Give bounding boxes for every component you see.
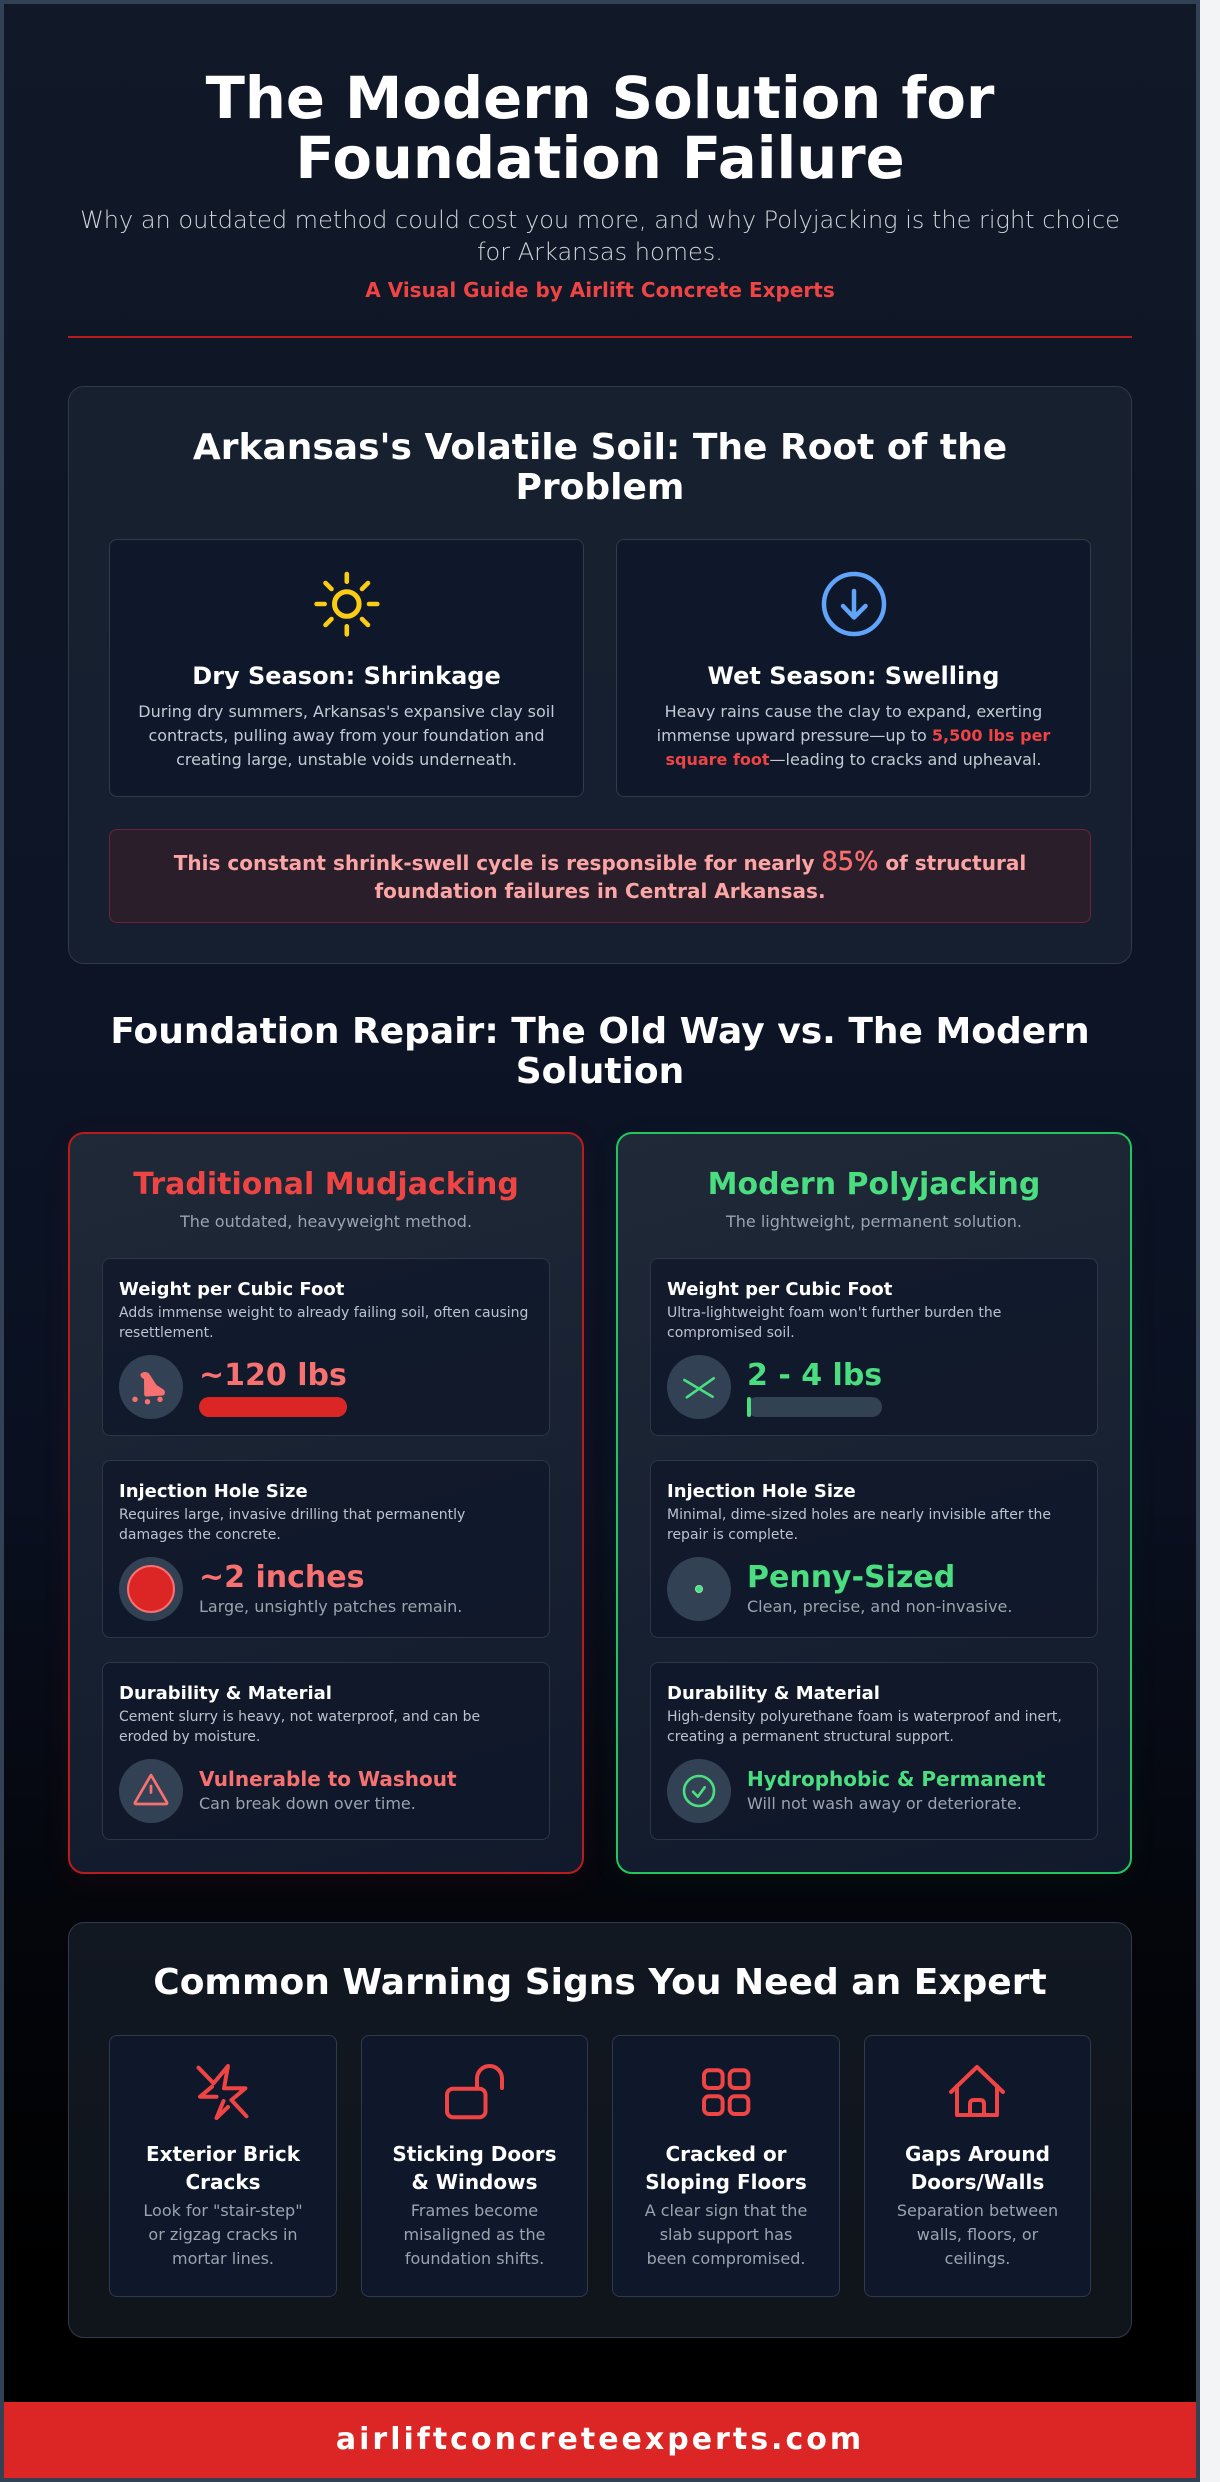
metric title: Injection Hole Size [667,1481,856,1502]
icon: feather [667,1355,731,1419]
metric text [119,1305,528,1341]
metric text: Cement slurry is heavy, not waterproof, and can be [119,1709,480,1725]
text: dry season [138,702,555,769]
text: brick cracks: Look for "stair-step" [143,2201,303,2220]
subheading: mudjacking: The outdated, heavyweight method. [180,1212,472,1231]
metric text: repair is complete. [667,1527,798,1543]
icon: small hole [667,1557,731,1621]
card: sticking doors [361,2035,588,2297]
title: sloping floors: Cracked or [665,2142,787,2166]
metric text: Ultra-lightweight foam won't further burden the [667,1305,1001,1321]
metric text: Minimal, dime-sized holes are nearly invisible after the [667,1507,1051,1523]
metric: mud durability [102,1662,550,1840]
metric: mud weight [102,1258,550,1436]
metric text [667,1305,1001,1341]
footer url: airliftconcreteexperts.com [336,2422,864,2457]
title: sticking doors: & Windows [412,2170,538,2194]
card: wet season [616,539,1091,797]
value: 120 lbs: ~120 lbs [199,1358,347,1393]
metric: foam durability [650,1662,1098,1840]
metric text: Requires large, invasive drilling that permanently [119,1507,465,1523]
metric: foam weight [650,1258,1098,1436]
icon: large hole [119,1557,183,1621]
title: brick cracks: Exterior Brick [146,2142,300,2166]
icon: warning [119,1759,183,1823]
callout text [174,847,1026,903]
heading: comparison: Foundation Repair: The Old Way vs. The Modern [110,1011,1090,1052]
panel: modern polyjacking [616,1132,1132,1874]
heading: polyjacking: Modern Polyjacking [708,1167,1040,1202]
title: gaps [905,2142,1050,2194]
metric text [667,1507,1051,1543]
heading: dry season: Dry Season: Shrinkage [192,662,501,690]
metric text: compromised soil. [667,1325,795,1341]
heading: warning signs: Common Warning Signs You Need an Expert [153,1962,1047,2003]
text: brick cracks: mortar lines. [172,2249,274,2268]
text: gaps: Separation between [897,2201,1058,2220]
heading: soil section: Problem [516,467,684,508]
metric text [667,1709,1062,1745]
metric text: creating a permanent structural support. [667,1729,954,1745]
value: 2-4 lbs: 2 - 4 lbs [747,1358,882,1393]
metric text [119,1507,465,1543]
heading: soil section: Arkansas's Volatile Soil: The Root of the [193,427,1007,468]
text: dry season: During dry summers, Arkansas's expansive clay soil [138,702,555,721]
text: wet season: immense upward pressure—up to 5,500 lbs per [657,726,1050,745]
text: sloping floors: been compromised. [647,2249,805,2268]
text: sticking doors: misaligned as the [404,2225,545,2244]
icon glyph: large hole [127,1565,175,1613]
text: brick cracks: or zigzag cracks in [148,2225,298,2244]
icon: house [948,2064,1006,2117]
value: 2 inches: ~2 inches [199,1560,364,1595]
value note: Can break down over time. [199,1794,416,1813]
title [206,65,994,192]
callout text: This constant shrink-swell cycle is responsible for nearly 85% of structural [174,847,1026,877]
icon: down arrow circle [822,572,886,636]
title: sloping floors: Sloping Floors [645,2170,807,2194]
icon glyph: check [682,1774,716,1808]
header divider [68,336,1132,338]
text: sloping floors [644,2201,807,2268]
metric title: Durability & Material [119,1683,332,1704]
title: brick cracks [146,2142,300,2194]
icon: roller skate [119,1355,183,1419]
text: gaps: ceilings. [945,2249,1010,2268]
icon glyph: roller skate [132,1372,165,1404]
value: penny sized: Penny-Sized [747,1560,955,1595]
text: wet season: square foot—leading to cracks and upheaval. [665,750,1042,769]
heading: comparison: Solution [516,1051,684,1092]
value note: Will not wash away or deteriorate. [747,1794,1022,1813]
subtitle: Why an outdated method could cost you more, and why Polyjacking is the right choice [80,206,1120,234]
panel: traditional mudjacking [68,1132,584,1874]
title: gaps: Gaps Around [905,2142,1050,2166]
text: sloping floors: slab support has [660,2225,792,2244]
text: gaps [897,2201,1058,2268]
heading: mudjacking: Traditional Mudjacking [133,1167,519,1202]
title: sloping floors [645,2142,807,2194]
callout text: foundation failures in Central Arkansas. [374,879,826,903]
panel: warning signs [68,1922,1132,2338]
metric text: damages the concrete. [119,1527,281,1543]
value: washout: Vulnerable to Washout [199,1767,457,1791]
text: wet season [657,702,1050,769]
title: gaps: Doors/Walls [911,2170,1044,2194]
metric text: High-density polyurethane foam is waterproof and inert, [667,1709,1062,1725]
callout: 85 percent [109,829,1091,923]
icon: crack [196,2064,249,2120]
card: brick cracks [109,2035,337,2297]
panel: volatile soil [68,386,1132,964]
text: sticking doors: Frames become [411,2201,538,2220]
bar fill [747,1397,750,1417]
text: sticking doors: foundation shifts. [405,2249,544,2268]
icon: open lock [445,2064,504,2120]
icon glyph: warning [134,1774,168,1806]
header [68,65,1132,338]
subtitle: for Arkansas homes. [477,238,723,266]
metric text: Adds immense weight to already failing soil, often causing [119,1305,528,1321]
metric text: eroded by moisture. [119,1729,260,1745]
value: hydrophobic: Hydrophobic & Permanent [747,1767,1045,1791]
text: dry season: creating large, unstable voids underneath. [176,750,517,769]
card: sloping floors [612,2035,840,2297]
metric: foam hole size [650,1460,1098,1638]
metric title: Durability & Material [667,1683,880,1704]
metric text [119,1709,480,1745]
text: sloping floors: A clear sign that the [645,2201,807,2220]
title: sticking doors [392,2142,557,2194]
metric title: Weight per Cubic Foot [119,1279,344,1300]
text: dry season: contracts, pulling away from your foundation and [148,726,545,745]
text: wet season: Heavy rains cause the clay to expand, exerting [665,702,1042,721]
byline: A Visual Guide by Airlift Concrete Experts [365,278,835,302]
title: brick cracks: Cracks [185,2170,261,2194]
text: sticking doors [404,2201,545,2268]
heading: wet season: Wet Season: Swelling [708,662,999,690]
title: sticking doors: Sticking Doors [392,2142,557,2166]
subheading: polyjacking: The lightweight, permanent solution. [726,1212,1022,1231]
icon: sun [314,572,380,637]
icon: tiles [702,2068,750,2116]
metric text: resettlement. [119,1325,214,1341]
metric title: Weight per Cubic Foot [667,1279,892,1300]
heading: soil section [193,427,1007,508]
icon: check [667,1759,731,1823]
heading: comparison [110,1011,1090,1092]
card: dry season [109,539,584,797]
metric: mud hole size [102,1460,550,1638]
text: gaps: walls, floors, or [917,2225,1038,2244]
icon glyph: small hole [695,1585,703,1593]
bar: 120 lbs [199,1397,347,1417]
bar: 2-4 lbs [747,1397,882,1417]
text: brick cracks [143,2201,303,2268]
subtitle [80,206,1120,266]
metric title: Injection Hole Size [119,1481,308,1502]
footer bar [4,2402,1196,2478]
card: gaps [864,2035,1091,2297]
value note: Clean, precise, and non-invasive. [747,1597,1012,1616]
icon glyph: feather [683,1376,716,1399]
title: The Modern Solution for [206,65,994,132]
title: Foundation Failure [295,125,905,192]
value note: Large, unsightly patches remain. [199,1597,462,1616]
